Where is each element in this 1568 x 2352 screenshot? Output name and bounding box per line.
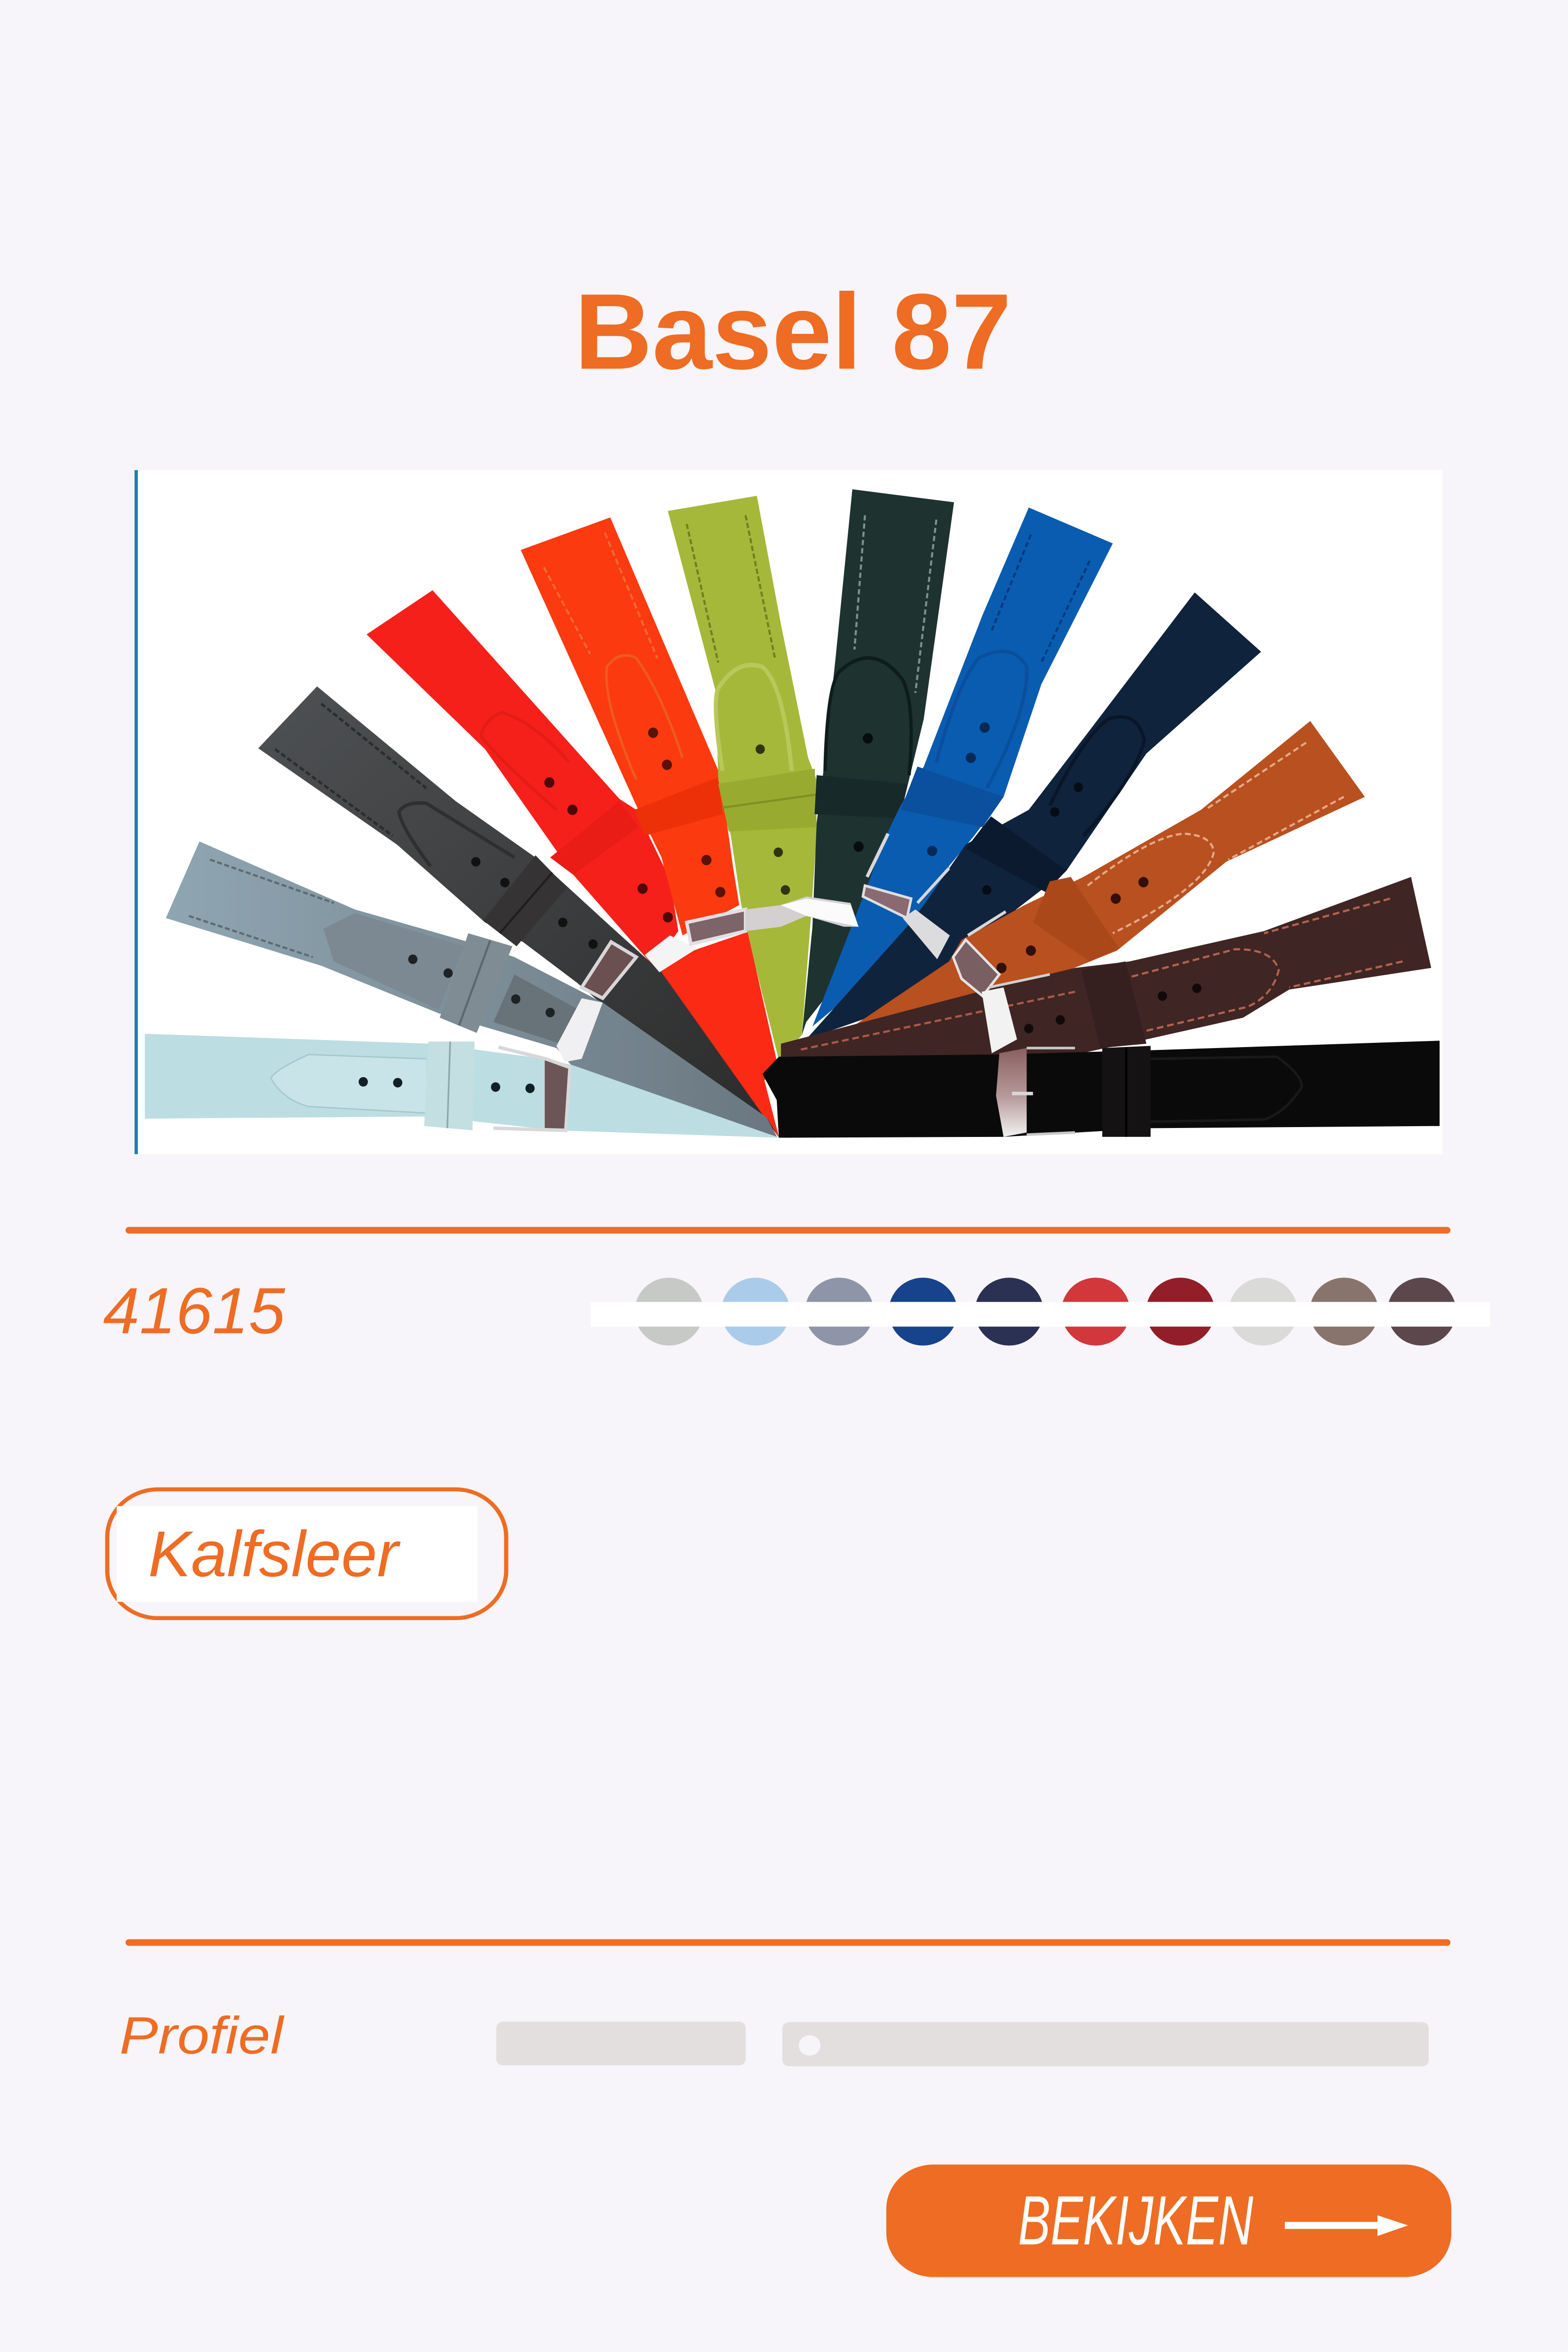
strap: rust (827, 721, 1365, 1044)
icon: arrow (1285, 2215, 1408, 2236)
divider: upper (126, 1227, 1450, 1233)
button (886, 2165, 1451, 2277)
product photo: fan of watch straps (135, 470, 1442, 1154)
title: Basel 87 (574, 272, 1011, 392)
profile shape: long (782, 2022, 1429, 2066)
strap: lime green (668, 496, 817, 1061)
divider: lower (126, 1939, 1450, 1946)
material pill (107, 1489, 506, 1618)
strap: red upper (366, 590, 678, 966)
button: BEKIJKEN (1018, 2182, 1253, 2259)
strap: red tail (653, 932, 779, 1138)
strap: blue (812, 508, 1113, 1026)
material pill: Kalfsleer (148, 1518, 401, 1590)
strap: dark grey (258, 686, 779, 1138)
colour swatches (591, 1278, 1490, 1345)
strap: pale blue (145, 1034, 779, 1138)
strap: brown (781, 877, 1431, 1057)
strap: grey blue (166, 842, 777, 1137)
product number: 41615 (103, 1274, 286, 1347)
strap: navy (806, 592, 1261, 1040)
strap: dark green (802, 489, 954, 1035)
strap: black (763, 1041, 1440, 1138)
buckles: right side (863, 834, 1075, 1137)
buckles (493, 897, 859, 1131)
strap: orange-red (521, 517, 739, 936)
profile shape: short (496, 2022, 746, 2066)
profile label: Profiel (119, 2007, 285, 2065)
